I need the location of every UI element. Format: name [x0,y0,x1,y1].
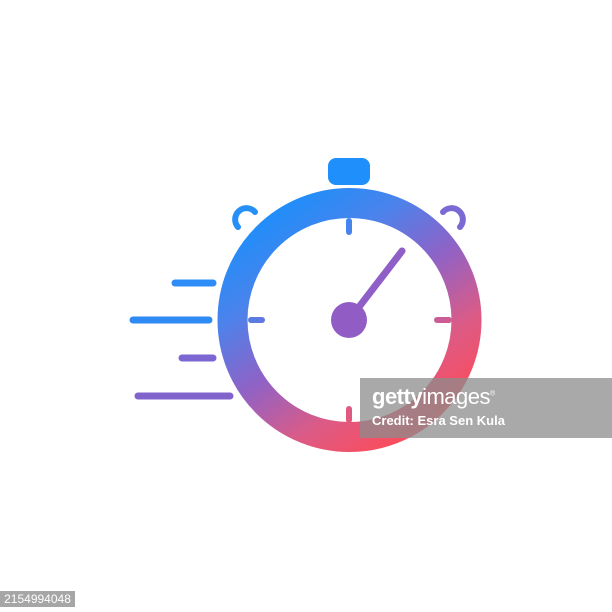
stopwatch top button [328,158,370,185]
image id: 2154994048 [4,592,71,606]
speed lines [133,283,230,396]
side hooks [235,208,463,227]
ticks [251,221,449,420]
watermark: Credit: Esra Sen Kula [372,413,505,428]
hand and hub [331,251,402,338]
watermark: gettyimages® [372,384,495,409]
ring [232,203,466,437]
watermark [360,378,612,438]
